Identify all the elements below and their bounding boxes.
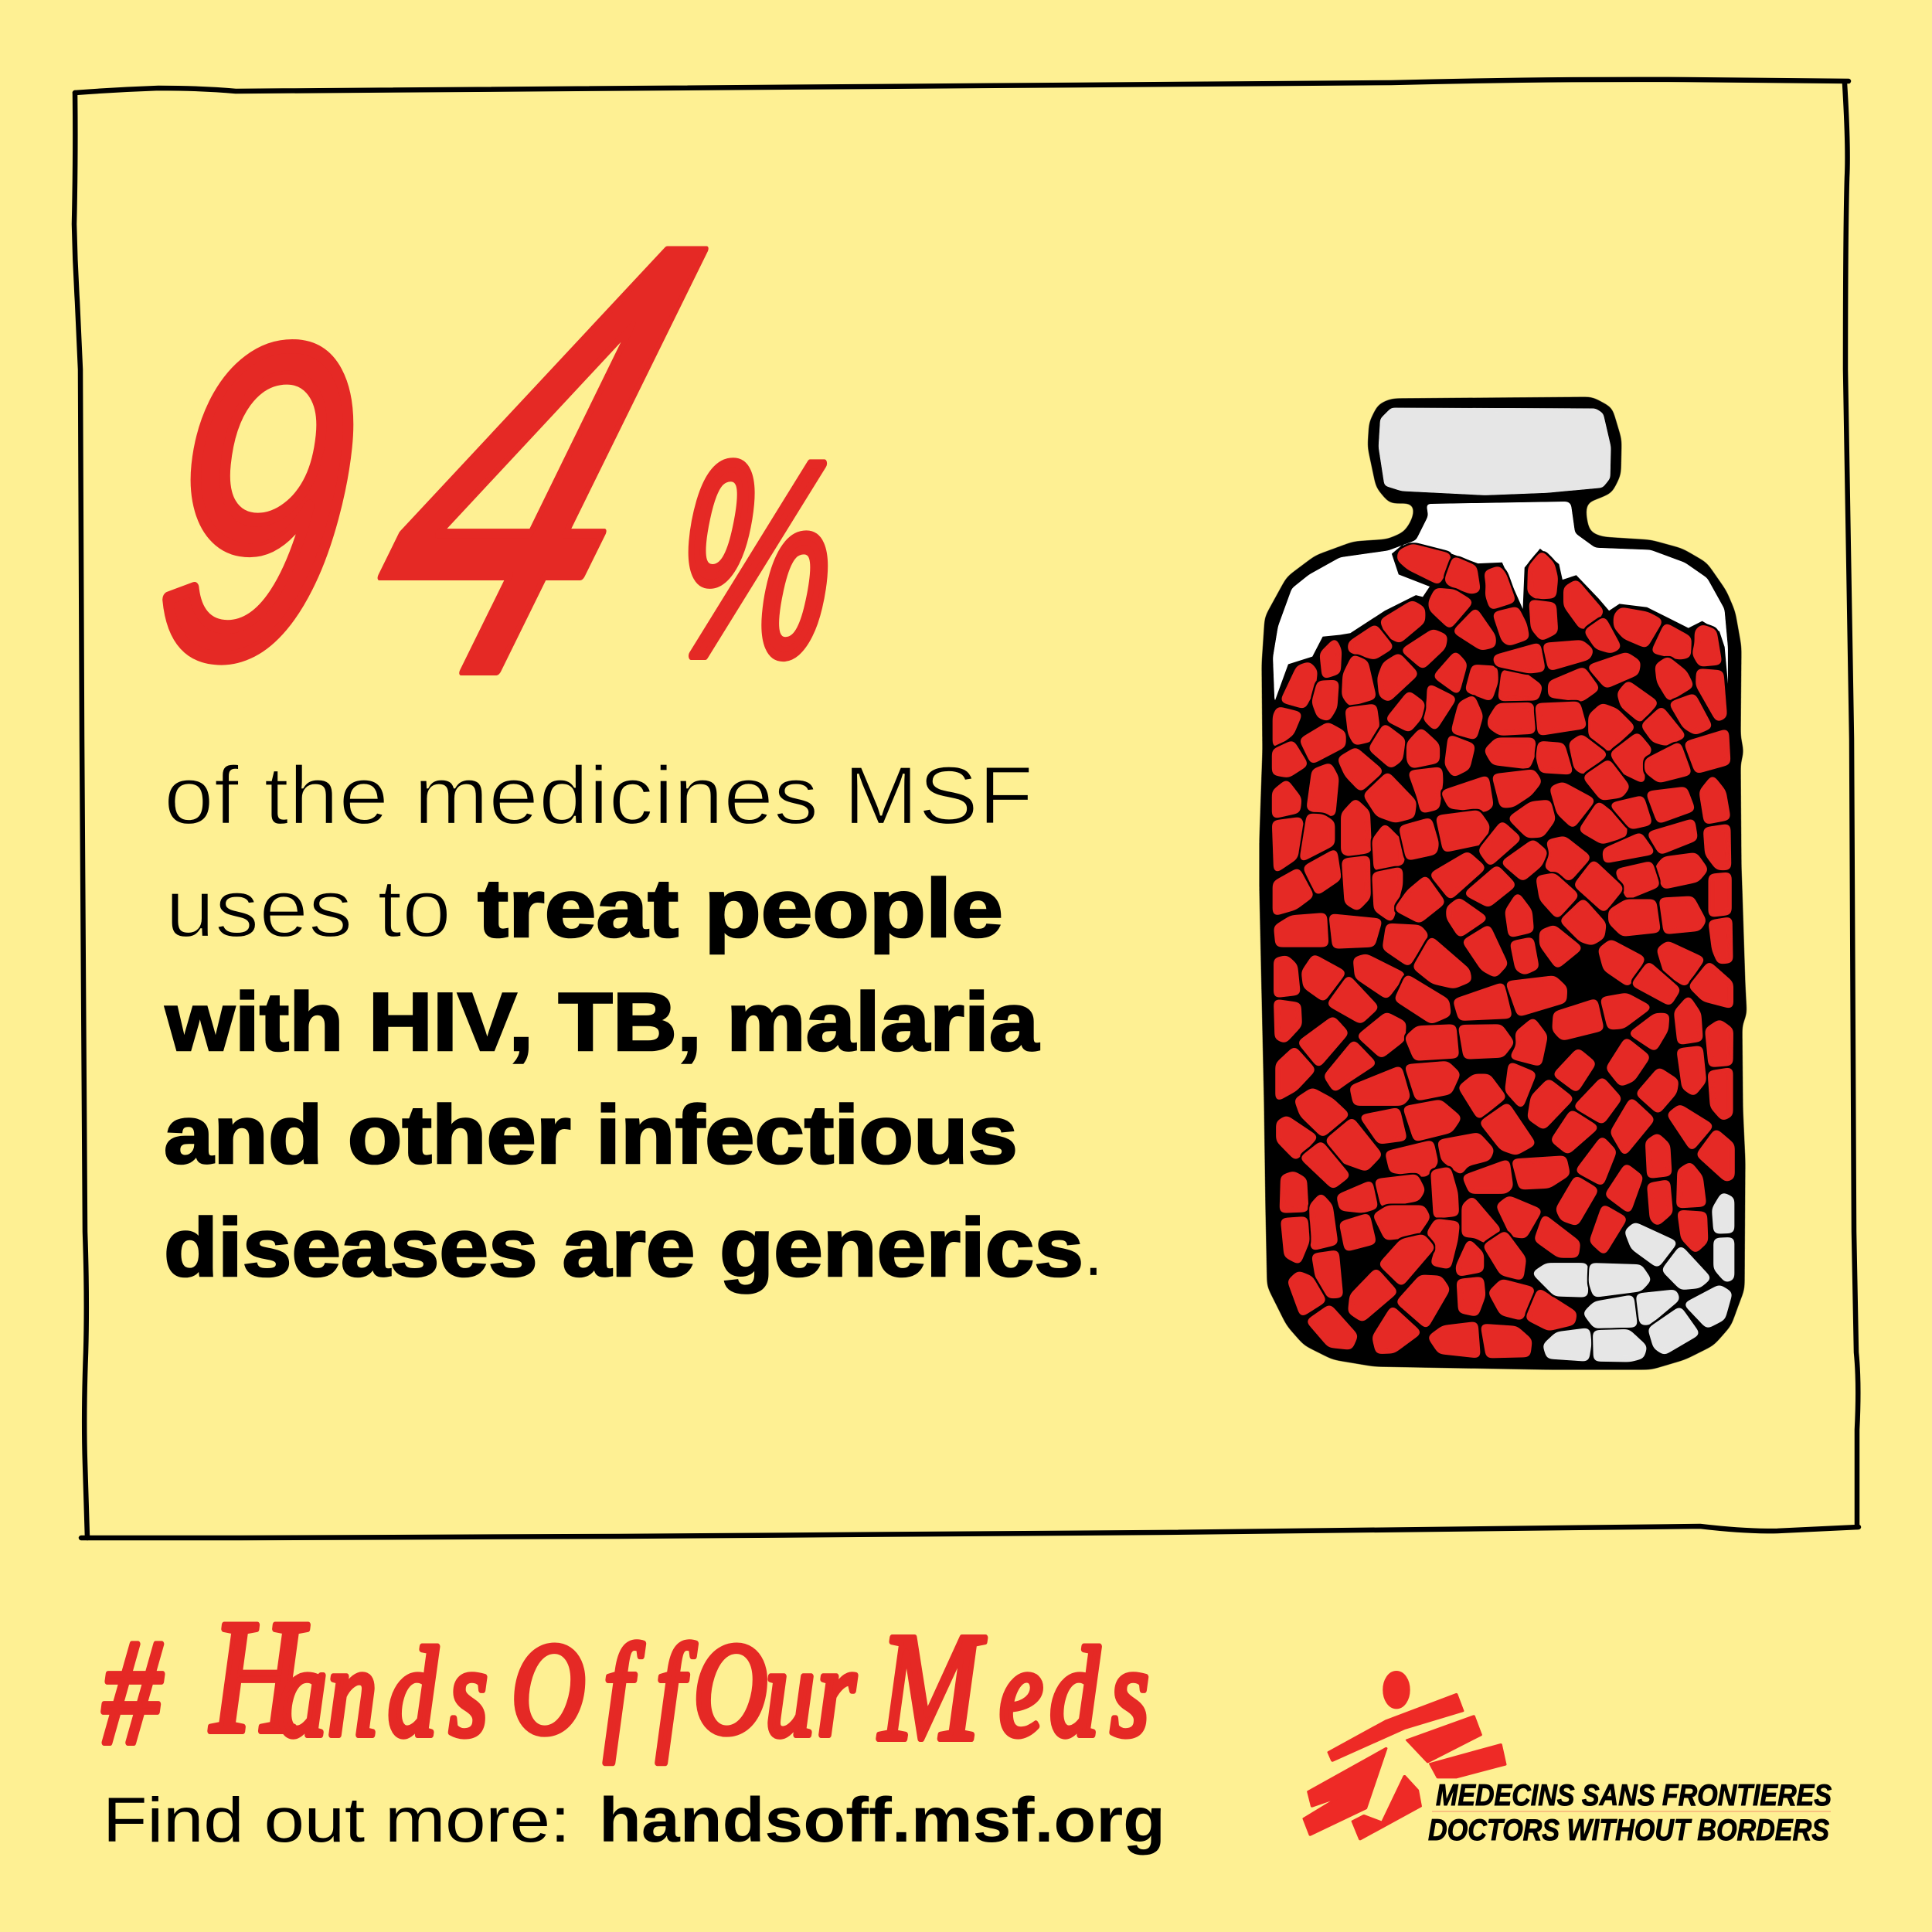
headline: 94%: 9 xyxy=(141,254,374,747)
hashtag: n xyxy=(328,1622,377,1764)
body text: with HIV, TB, malaria xyxy=(165,975,1040,1068)
hashtag: f xyxy=(656,1617,696,1764)
hashtag: a xyxy=(277,1622,327,1764)
body text: . xyxy=(1082,1201,1105,1294)
white pills xyxy=(1535,1195,1732,1359)
body text: and other infectious xyxy=(164,1088,1018,1181)
hashtag: f xyxy=(604,1617,644,1764)
body text: of the medicines MSF xyxy=(164,749,1033,842)
hashtag: O xyxy=(512,1615,585,1761)
red pills, upper half xyxy=(1274,546,1729,921)
hashtag: s xyxy=(1111,1622,1149,1764)
hashtag: u xyxy=(765,1622,815,1764)
hashtag: s xyxy=(449,1622,488,1764)
red pills, lower half xyxy=(1276,895,1732,1355)
MSF logo xyxy=(1304,1672,1832,1847)
hashtag: d xyxy=(388,1622,438,1764)
logo wordmark xyxy=(1428,1779,1832,1847)
hashtag: H xyxy=(209,1587,308,1767)
hand-drawn frame xyxy=(74,80,1859,1538)
body text xyxy=(164,749,1105,1294)
hashtag: # xyxy=(102,1608,163,1775)
body text: treat people xyxy=(478,862,1003,954)
pill bottle illustration xyxy=(1261,399,1745,1368)
headline: 94%: 4 xyxy=(297,119,769,801)
find out more link: Find out more: xyxy=(103,1785,570,1855)
bottle cap xyxy=(1379,409,1610,494)
headline: 94% xyxy=(141,119,847,801)
black mass behind pills xyxy=(1274,545,1729,890)
hashtag: r xyxy=(817,1622,856,1764)
headline: 94%: % xyxy=(664,403,847,714)
hashtag: M xyxy=(878,1601,986,1772)
hashtag: d xyxy=(1049,1622,1100,1764)
find out more link: handsoff.msf.org xyxy=(599,1785,1165,1855)
logo wordmark: DOCTORS WITHOUT BORDERS xyxy=(1428,1814,1829,1847)
hashtag: e xyxy=(999,1622,1043,1764)
body text: diseases are generics xyxy=(164,1201,1083,1294)
empty glass area xyxy=(1273,502,1728,702)
hashtag: O xyxy=(693,1615,767,1761)
body text: uses to xyxy=(165,862,451,954)
icon: running figure xyxy=(1304,1672,1505,1839)
logo wordmark: MEDECINS SANS FRONTIERES xyxy=(1436,1779,1832,1812)
find out more link xyxy=(103,1785,1165,1855)
bottle silhouette xyxy=(1261,399,1745,1368)
